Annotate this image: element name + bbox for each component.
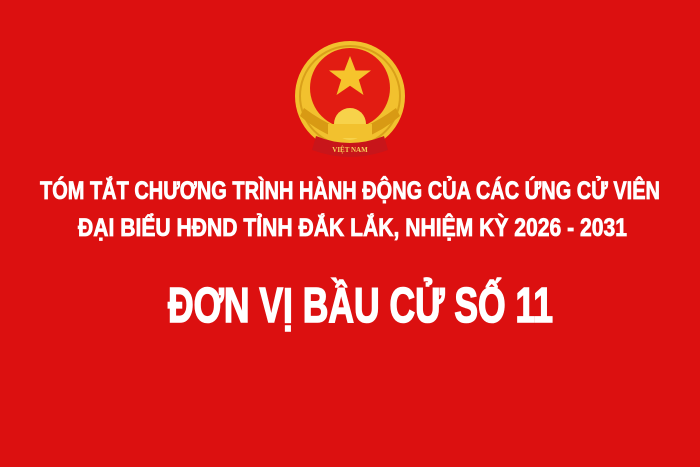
- icon: national emblem: [295, 41, 405, 157]
- icon: national emblem: VIỆT NAM: [332, 146, 368, 154]
- heading: electoral unit: ĐƠN VỊ BẦU CỬ SỐ 11: [168, 278, 553, 333]
